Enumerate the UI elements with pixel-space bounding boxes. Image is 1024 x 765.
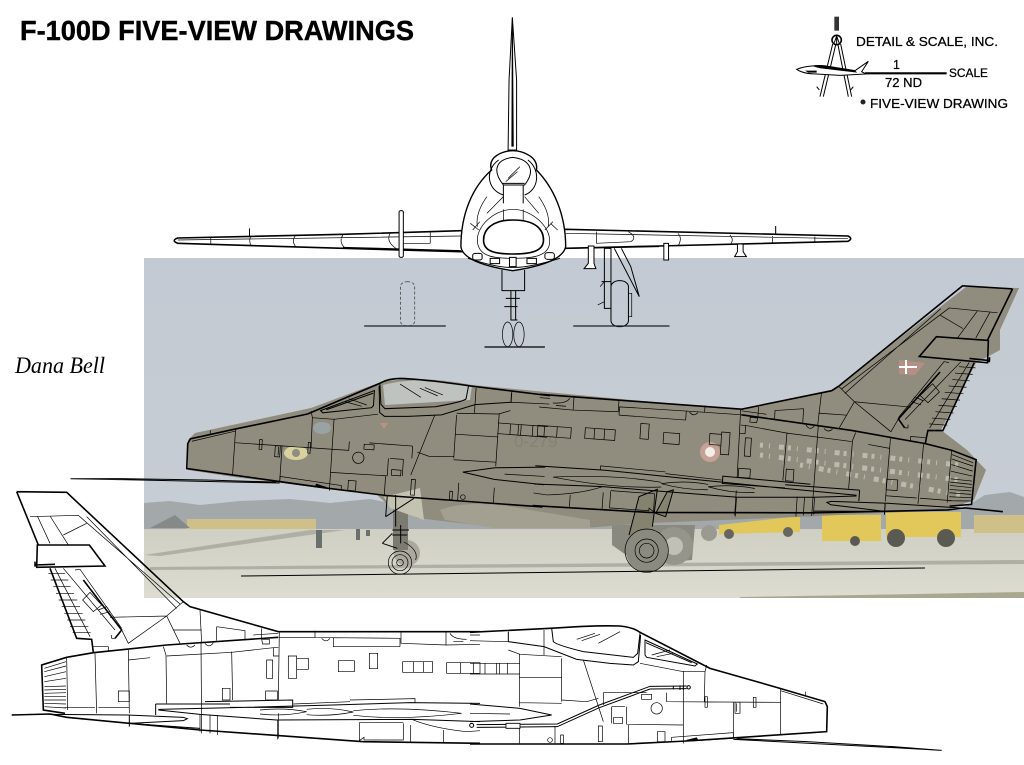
- logo: compass and aircraft: [797, 17, 947, 97]
- photo: ground crew: [316, 529, 370, 548]
- photo: shadowed under-fuselage and rear wheel: [393, 505, 695, 566]
- logo: company name: DETAIL & SCALE, INC.: [856, 35, 998, 49]
- front view: nose cannon ports: [468, 253, 560, 267]
- front view: intake: [470, 209, 558, 258]
- logo: five-view label: FIVE-VIEW DRAWING: [870, 97, 1008, 111]
- photo: main gear doors: [629, 489, 673, 537]
- line drawing overlaid on photo: side view: [71, 221, 1018, 547]
- logo: scale label: SCALE: [949, 68, 988, 80]
- front view: dashed drop tank outline: [364, 282, 446, 326]
- bottom side view: refuelling probe: [470, 685, 690, 728]
- photo: concrete apron: [144, 529, 1024, 598]
- bottom side-view drawing: [12, 492, 942, 750]
- photo: yellow buildings: [187, 515, 1024, 533]
- front view drawing: [174, 17, 851, 347]
- photo: yellow vehicles: [701, 512, 961, 547]
- front view: wing panel lines: [178, 232, 848, 249]
- photo: tree line: [144, 492, 1024, 530]
- photo: main wheel tyre: [626, 530, 668, 572]
- front view: wings: [174, 229, 851, 252]
- front view: nose landing gear: [485, 270, 545, 347]
- photo: grass strip: [740, 592, 1024, 598]
- logo: Detail & Scale five-view badge: [797, 17, 1008, 111]
- photo: nose gear bay: [384, 488, 424, 520]
- front view: main landing gear: [573, 248, 669, 327]
- photo: aircraft fuselage and fin: [188, 287, 1019, 528]
- front view: fuselage: [461, 151, 566, 271]
- front view: canopy: [477, 157, 549, 227]
- front view: wing tips and pylons: [249, 211, 776, 269]
- photo: worn paint speckles on rear fuselage: [760, 445, 960, 495]
- photograph panel: F-100D on the ramp: [144, 258, 1024, 598]
- logo: fraction denominator: 72 ND: [885, 76, 922, 90]
- front view: vertical fin: [508, 17, 517, 150]
- photo: canopy glass: [383, 380, 472, 405]
- photo: belly drop tank shape: [440, 504, 590, 528]
- overlay: ground line: [241, 568, 925, 576]
- national roundel: [700, 442, 720, 462]
- logo: fraction numerator: 1: [893, 58, 900, 72]
- photo: serial number: 0-279: [514, 432, 557, 451]
- overlay: nose landing gear: [382, 495, 416, 574]
- title: F-100D FIVE-VIEW DRAWINGS: [20, 15, 414, 46]
- logo: bullet: [860, 100, 866, 104]
- signature: Dana Bell: [14, 353, 105, 378]
- overlay: main landing gear: [625, 489, 673, 572]
- photo: hangar silhouette: [150, 515, 190, 528]
- photo: darker ramp bands: [144, 530, 1024, 570]
- front view: under-wing fairing: [343, 247, 659, 251]
- tail flag: [899, 360, 925, 375]
- photo: nose insignia: [284, 422, 388, 460]
